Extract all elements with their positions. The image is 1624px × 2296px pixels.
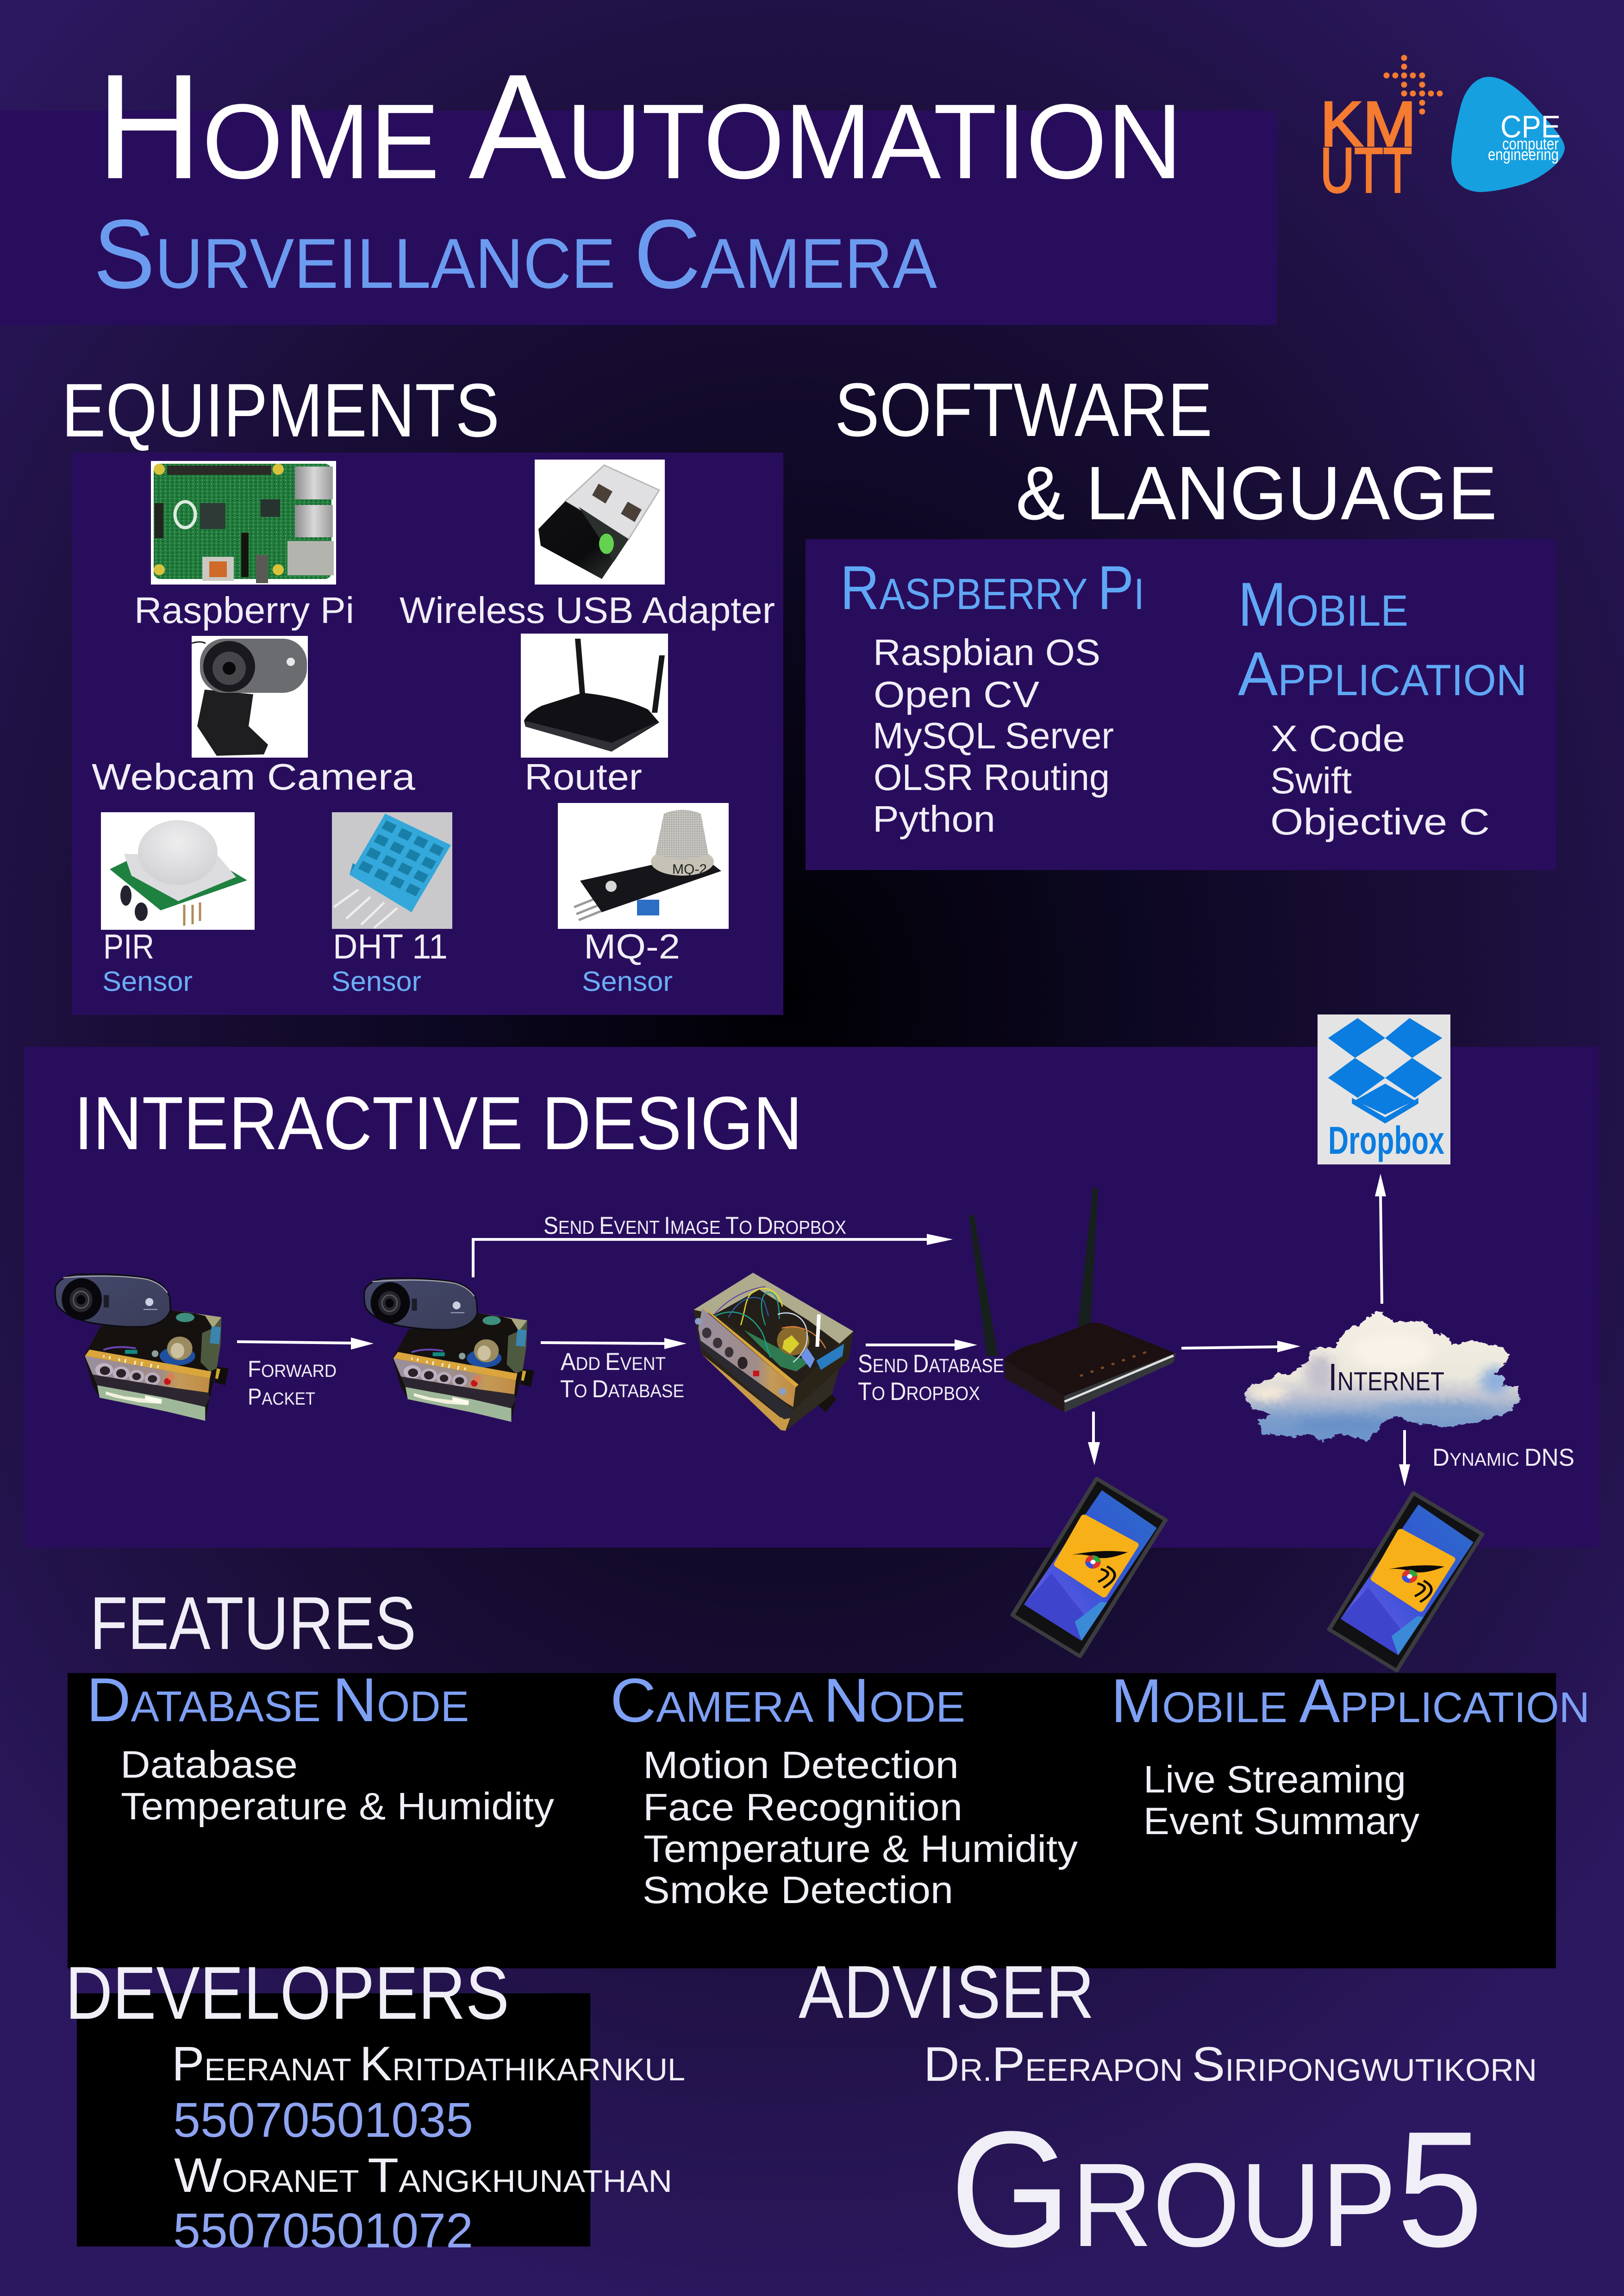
logo: KMUTT: UTT — [1320, 135, 1412, 206]
label: send database to dropbox — [858, 1349, 1004, 1406]
column: mobile application — [1111, 1667, 1590, 1842]
photo: MQ-2 sensor — [558, 803, 729, 929]
logo: KMUTT: KM — [1320, 89, 1416, 160]
label: MQ-2: MQ-2 — [584, 927, 680, 966]
arrow: internet to phone — [1399, 1430, 1410, 1487]
icon: database node — [693, 1273, 853, 1431]
photo: wireless USB adapter — [535, 460, 665, 585]
label: send database to dropbox: SEND DATABASE — [858, 1349, 1004, 1378]
column: camera node: CAMERA NODE — [610, 1666, 965, 1735]
list: Raspberry Pi software — [873, 632, 1114, 840]
logo: CPE computer engineering: computer — [1502, 134, 1559, 153]
label: MQ-2 Sensor: Sensor — [582, 966, 673, 997]
icon: phone 2 — [1329, 1493, 1482, 1671]
heading: adviser: ADVISER — [799, 1950, 1094, 2034]
panel: software and language — [806, 539, 1556, 870]
icon: camera node 2 — [364, 1278, 534, 1422]
adviser name: DR.PEERAPON SIRIPONGWUTIKORN — [924, 2037, 1537, 2091]
label: Wireless USB Adapter: Wireless USB Adapter — [400, 590, 775, 631]
logo: CPE computer engineering: CPE — [1500, 109, 1561, 144]
column: camera node: Smoke Detection — [643, 1868, 953, 1911]
photo: MQ-2 sensor: MQ-2 — [672, 862, 707, 877]
icon: cloud — [1244, 1312, 1520, 1441]
photo: PIR sensor — [101, 812, 255, 930]
photo: webcam — [192, 636, 308, 758]
photo: router — [521, 634, 668, 758]
icon: Dropbox: Dropbox — [1328, 1119, 1444, 1162]
logo: CPE computer engineering: engineering — [1488, 145, 1559, 164]
heading: features: FEATURES — [90, 1581, 416, 1665]
label: forward packet: FORWARD — [248, 1356, 337, 1382]
developer: Peeranat Kritdathikarnkul: PEERANAT KRITDATHIKARNKUL — [172, 2037, 685, 2091]
label: send database to dropbox: TO DROPBOX — [858, 1377, 980, 1406]
label: DHT Sensor: Sensor — [331, 966, 421, 997]
list: Raspberry Pi software: Raspbian OS — [873, 632, 1100, 673]
column: camera node: Temperature & Humidity — [643, 1827, 1078, 1870]
arrow: router to phone — [1088, 1412, 1100, 1465]
column: mobile application: Event Summary — [1143, 1799, 1420, 1842]
photo: DHT11 sensor — [332, 812, 452, 929]
arrow: router to internet — [1181, 1341, 1300, 1352]
arrow: send database — [866, 1339, 977, 1350]
subtitle: SURVEILLANCE CAMERA — [94, 199, 937, 309]
column: database node: Temperature & Humidity — [121, 1785, 555, 1828]
heading: equipments: EQUIPMENTS — [62, 368, 500, 453]
label: forward packet — [248, 1356, 337, 1410]
list: Raspberry Pi software: OLSR Routing — [874, 757, 1110, 798]
arrow: internet to dropbox — [1375, 1174, 1386, 1304]
icon: phone 1 — [1012, 1479, 1166, 1656]
panel: developers — [77, 1993, 590, 2246]
list: mobile languages: X Code — [1271, 718, 1405, 759]
label: PIR Sensor: Sensor — [102, 966, 193, 997]
column: database node — [87, 1666, 555, 1828]
arrow: send event image — [473, 1234, 953, 1277]
group number: GROUP5 — [950, 2097, 1483, 2281]
label: send event image to dropbox: SEND EVENT IMAGE TO DROPBOX — [543, 1212, 846, 1239]
heading: software and language — [835, 367, 1497, 535]
label: add event to database: TO DATABASE — [560, 1375, 684, 1403]
subheading: Raspberry Pi: RASPBERRY PI — [840, 554, 1144, 622]
label: PIR: PIR — [103, 927, 154, 966]
student id 2: 55070501072 — [173, 2203, 473, 2258]
column: database node: DATABASE NODE — [87, 1666, 469, 1735]
label: add event to database — [560, 1348, 684, 1403]
student id 1: 55070501035 — [173, 2093, 473, 2147]
panel: interactive design — [24, 1047, 1599, 1548]
subheading: Mobile Application: APPLICATION — [1238, 640, 1527, 709]
label: DHT 11: DHT 11 — [333, 927, 448, 966]
label: internet: INTERNET — [1328, 1356, 1444, 1399]
arrow: add event — [541, 1338, 687, 1349]
column: camera node: Motion Detection — [643, 1743, 959, 1786]
arrow: forward packet — [237, 1338, 374, 1350]
icon: router — [969, 1188, 1176, 1412]
label: Router: Router — [525, 756, 642, 797]
heading: interactive design: INTERACTIVE DESIGN — [74, 1081, 802, 1165]
list: Raspberry Pi software: Python — [873, 798, 995, 840]
heading: software and language: SOFTWARE — [835, 367, 1212, 452]
column: mobile application: MOBILE APPLICATION — [1111, 1667, 1590, 1736]
label: forward packet: PACKET — [248, 1384, 315, 1410]
panel: equipments — [72, 453, 783, 1015]
list: mobile languages: Objective C — [1270, 801, 1490, 842]
list: mobile languages: Swift — [1270, 760, 1352, 801]
column: mobile application: Live Streaming — [1143, 1758, 1406, 1801]
panel: title band — [0, 111, 1277, 325]
icon: Dropbox — [1318, 1014, 1450, 1164]
photo: Raspberry Pi board — [151, 461, 336, 585]
column: camera node: Face Recognition — [643, 1786, 962, 1829]
developer: Woranet Tangkhunathan: WORANET TANGKHUNATHAN — [174, 2148, 672, 2203]
logo: CPE computer engineering — [1451, 77, 1565, 192]
heading: developers: DEVELOPERS — [65, 1951, 509, 2035]
label: dynamic dns: DYNAMIC DNS — [1432, 1444, 1574, 1471]
label: Webcam Camera: Webcam Camera — [92, 756, 416, 797]
list: Raspberry Pi software: MySQL Server — [873, 715, 1114, 756]
list: Raspberry Pi software: Open CV — [874, 674, 1040, 715]
column: camera node — [610, 1666, 1078, 1911]
logo: KMUTT — [1320, 55, 1443, 206]
icon: camera node 1 — [55, 1274, 228, 1421]
panel: features — [68, 1666, 1590, 1968]
subheading: Mobile Application — [1238, 570, 1527, 709]
column: database node: Database — [120, 1743, 298, 1786]
label: add event to database: ADD EVENT — [561, 1348, 666, 1375]
subheading: Mobile Application: MOBILE — [1238, 570, 1408, 639]
heading: software and language: & LANGUAGE — [1016, 451, 1497, 535]
label: Raspberry Pi: Raspberry Pi — [134, 590, 354, 631]
title: HOME AUTOMATION — [96, 44, 1182, 210]
list: mobile languages — [1270, 718, 1490, 842]
